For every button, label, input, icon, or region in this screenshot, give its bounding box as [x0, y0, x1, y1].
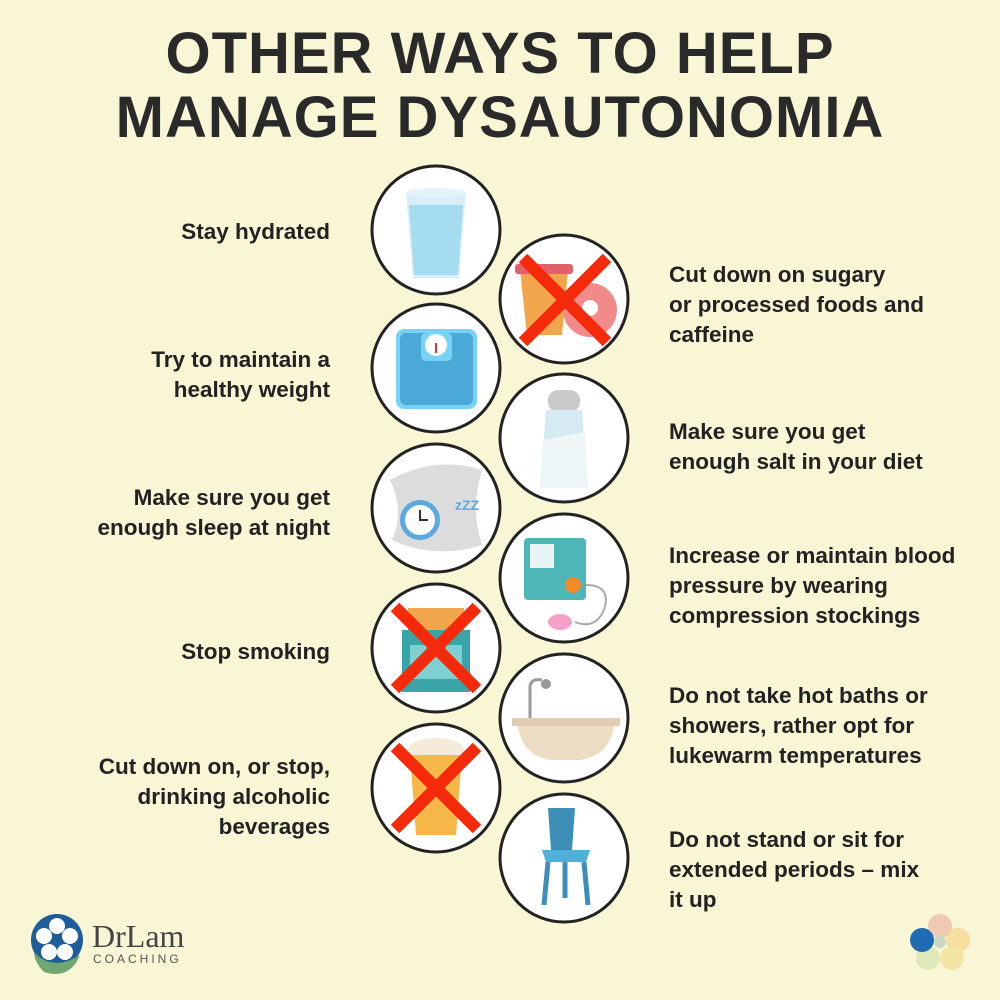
text: salt: enough salt in your diet [669, 449, 923, 474]
text: sleep: Make sure you get [134, 485, 330, 510]
text: sleep: enough sleep at night [97, 515, 330, 540]
text: stay hydrated: Stay hydrated [181, 219, 330, 244]
text: blood pressure: pressure by wearing [669, 573, 888, 598]
logo: DrLam coaching: COACHING [93, 952, 182, 966]
text: blood pressure: compression stockings [669, 603, 920, 628]
icon: pillow and alarm clock: zZZ [455, 497, 480, 513]
text: alcohol: beverages [219, 814, 330, 839]
icon: coffee and donut crossed [500, 235, 628, 363]
title: OTHER WAYS TO HELP [166, 21, 834, 86]
text: hot baths: lukewarm temperatures [669, 743, 922, 768]
text: healthy weight: healthy weight [174, 377, 330, 402]
text: stand or sit: extended periods – mix [669, 857, 919, 882]
text: hot baths: Do not take hot baths or [669, 683, 928, 708]
logo: DrLam coaching: DrLam [92, 918, 185, 954]
logo: DrLam coaching [31, 914, 185, 974]
text: sugary foods: Cut down on sugary [669, 262, 885, 287]
text: alcohol: drinking alcoholic [137, 784, 330, 809]
icon: blood pressure monitor [500, 514, 628, 642]
text: stand or sit: Do not stand or sit for [669, 827, 904, 852]
text: stand or sit: it up [669, 887, 716, 912]
icon: salt shaker [500, 374, 628, 502]
icon: beer crossed [372, 724, 500, 852]
text: alcohol: Cut down on, or stop, [99, 754, 330, 779]
text: stand or sit [669, 827, 919, 912]
text: sugary foods [669, 262, 924, 347]
text: salt: Make sure you get [669, 419, 865, 444]
text: healthy weight [151, 347, 330, 402]
icon: pillow and alarm clock [372, 444, 500, 572]
icon: water glass [372, 166, 500, 294]
icon: bathtub [500, 654, 628, 782]
text: hot baths [669, 683, 928, 768]
title: MANAGE DYSAUTONOMIA [116, 85, 884, 150]
icon: cigarettes crossed [372, 584, 500, 712]
text: blood pressure [669, 543, 955, 628]
title [116, 21, 884, 150]
text: alcohol [99, 754, 330, 839]
text: stop smoking: Stop smoking [181, 639, 330, 664]
text: salt [669, 419, 923, 474]
icon: scale [372, 304, 500, 432]
logo: flower mark [910, 914, 970, 970]
text: sugary foods: or processed foods and [669, 292, 924, 317]
text: blood pressure: Increase or maintain blood [669, 543, 955, 568]
text: sugary foods: caffeine [669, 322, 754, 347]
text: hot baths: showers, rather opt for [669, 713, 914, 738]
text: sleep [97, 485, 330, 540]
icon: chair [500, 794, 628, 922]
text: healthy weight: Try to maintain a [151, 347, 330, 372]
